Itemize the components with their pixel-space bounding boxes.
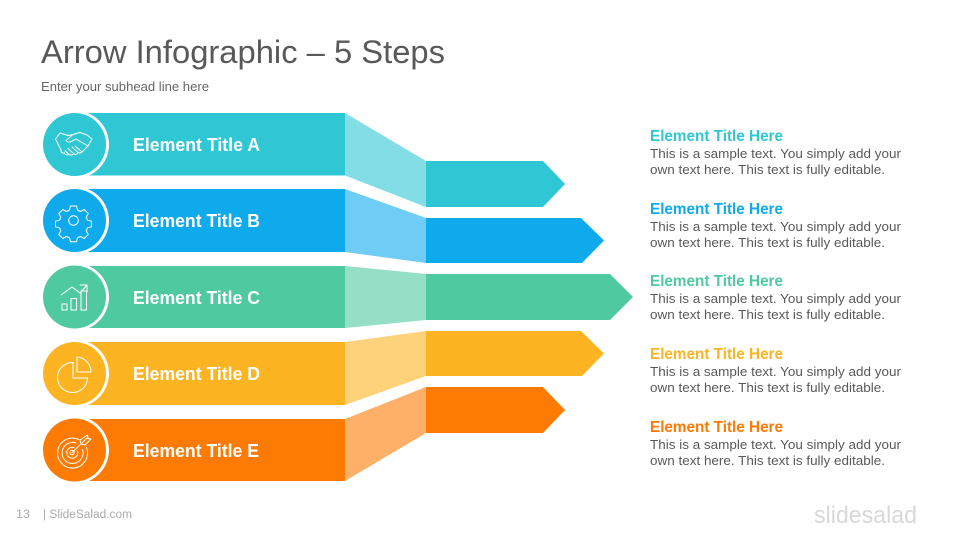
- bar title E: Element Title E: [133, 441, 259, 461]
- arrow C: [426, 274, 633, 320]
- arrow B: [426, 218, 604, 263]
- text block B: This is a sample text. You simply add your: [650, 220, 901, 234]
- text block D: own text here. This text is fully editable.: [650, 381, 885, 395]
- icon badge E: target: [41, 416, 109, 484]
- step A: bar, connector and arrow: [80, 113, 565, 207]
- bar title A: Element Title A: [133, 135, 260, 155]
- text block A: This is a sample text. You simply add your: [650, 147, 901, 161]
- text block C: Element Title Here: [650, 273, 783, 290]
- text block A: [650, 128, 901, 177]
- bar title B: Element Title B: [133, 211, 260, 231]
- icon badge A: handshake: [41, 110, 109, 178]
- text block B: [650, 201, 901, 250]
- arrow E: [426, 387, 565, 433]
- title: Arrow Infographic – 5 Steps: [41, 34, 445, 70]
- bar title D: Element Title D: [133, 364, 260, 384]
- step C: bar, connector and arrow: [80, 266, 633, 328]
- text block E: [650, 419, 901, 468]
- connector C: [345, 266, 426, 328]
- bar E: [80, 419, 345, 481]
- step D: bar, connector and arrow: [80, 331, 604, 405]
- connector E: [345, 387, 426, 481]
- bar C: [80, 266, 345, 328]
- footer logo: slidesalad: [814, 502, 917, 529]
- text block D: [650, 346, 901, 395]
- connector B: [345, 189, 426, 263]
- arrow A: [426, 161, 565, 207]
- step B: bar, connector and arrow: [80, 189, 604, 263]
- text block D: Element Title Here: [650, 346, 783, 363]
- text block B: Element Title Here: [650, 201, 783, 218]
- text block E: Element Title Here: [650, 419, 783, 436]
- text block D: This is a sample text. You simply add your: [650, 365, 901, 379]
- bar title C: Element Title C: [133, 288, 260, 308]
- text block A: own text here. This text is fully editable.: [650, 163, 885, 177]
- text block C: [650, 273, 901, 322]
- bar A: [80, 113, 345, 176]
- connector A: [345, 113, 426, 207]
- bar D: [80, 342, 345, 405]
- icon badge B: gear: [41, 186, 109, 254]
- footer site name: | SlideSalad.com: [43, 509, 132, 521]
- bar B: [80, 189, 345, 252]
- text block C: own text here. This text is fully editable.: [650, 308, 885, 322]
- footer page number: 13: [16, 509, 30, 521]
- text block E: own text here. This text is fully editable.: [650, 454, 885, 468]
- step E: bar, connector and arrow: [80, 387, 565, 481]
- connector D: [345, 331, 426, 405]
- subhead: Enter your subhead line here: [41, 80, 209, 94]
- text block C: This is a sample text. You simply add your: [650, 292, 901, 306]
- text block E: This is a sample text. You simply add your: [650, 438, 901, 452]
- icon badge D: pie chart: [41, 340, 109, 408]
- text block A: Element Title Here: [650, 128, 783, 145]
- arrow D: [426, 331, 604, 376]
- icon badge C: growth chart: [41, 263, 109, 331]
- text block B: own text here. This text is fully editable.: [650, 236, 885, 250]
